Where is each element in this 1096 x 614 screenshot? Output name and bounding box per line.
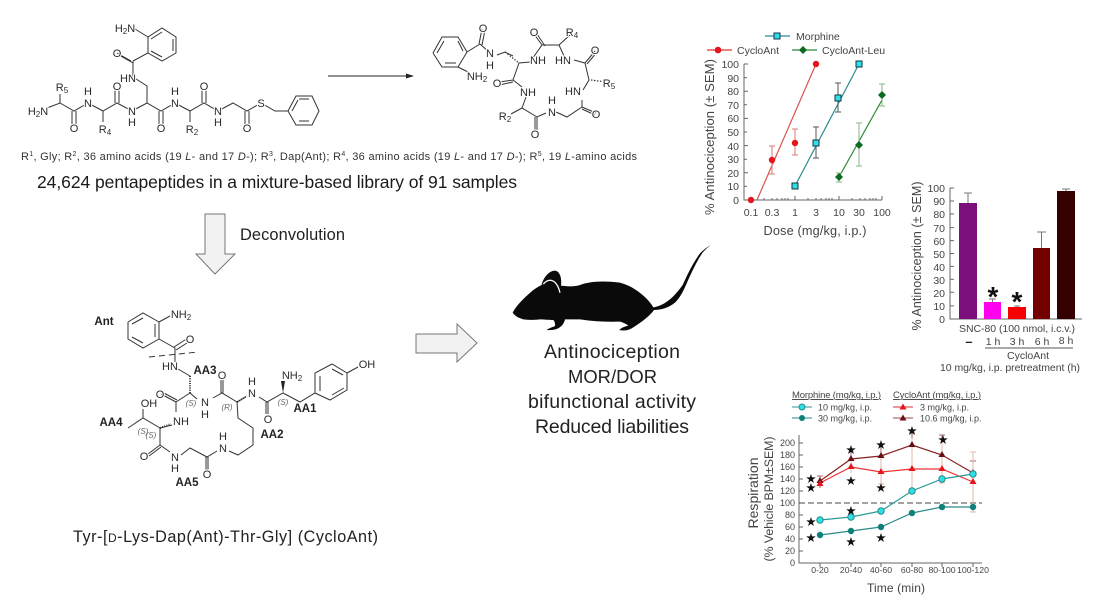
bar: SNC-80 alone [959,203,977,319]
chemical structure: linear pentapeptide thioester: N [84,98,92,110]
bar: 8 h [1057,191,1075,319]
chemical structure: cyclic pentapeptide: NH [530,55,546,67]
chemical structure: linear pentapeptide thioester: 2 [123,27,128,36]
chemical structure: cyclic pentapeptide: O [479,23,488,35]
chemical structure: linear pentapeptide thioester [28,23,319,137]
chemical structure: CycloAnt: AA1 [293,403,317,415]
chemical structure: linear pentapeptide thioester: N [214,106,222,118]
chart: respiration time course: 20 [785,546,795,556]
axis title: dose: Dose (mg/kg, i.p.) [764,224,866,238]
chemical structure: CycloAnt: H [171,463,179,475]
chart: respiration time course: 40-60 [870,565,892,575]
chemical structure: linear pentapeptide thioester: H [171,86,179,98]
chemical structure: linear pentapeptide thioester: S [257,98,265,110]
chart: SNC-80 bar chart: 40 [933,262,945,274]
library composition text: R [21,151,29,163]
chart: respiration time course: 160 [780,462,795,472]
chemical structure: linear pentapeptide thioester: H [115,23,123,35]
label: deconvolution: Deconvolution [240,226,345,244]
chemical structure: linear pentapeptide thioester: N [40,106,48,118]
chart: SNC-80 bar chart: * [1012,286,1023,317]
chemical structure: cyclic pentapeptide: H [486,60,494,72]
chemical structure: CycloAnt: (S) [146,431,157,440]
chemical structure: linear pentapeptide thioester: O [243,123,252,135]
legend: respiration: CycloAnt (mg/kg, i.p.) [893,390,981,401]
chemical structure: CycloAnt: AA3 [193,365,217,377]
text block: outcomes: MOR/DOR [568,366,657,387]
chemical structure: linear pentapeptide thioester: H [214,117,222,129]
chemical structure: cyclic pentapeptide: O [592,109,601,121]
chart: dose response: 40 [727,141,739,153]
library composition text: 3 [269,151,273,158]
chemical structure: cyclic pentapeptide: 4 [574,31,579,40]
bar: 1 h [984,302,1001,319]
chart: SNC-80 bar chart: * [988,281,999,312]
chemical structure: CycloAnt: N [201,397,209,409]
chart: respiration time course: ★ [845,474,857,488]
chart: SNC-80 bar chart: 50 [933,249,945,261]
chemical structure: cyclic pentapeptide: HN [565,86,581,98]
chart: SNC-80 bar chart: 30 [933,275,945,287]
library composition text: L- and 17 D-); R [185,151,269,163]
chart: dose response: 0.3 [765,207,779,219]
chart: respiration time course: 100 [780,498,795,508]
chart: respiration time course: 180 [780,450,795,460]
chart: respiration time course: 40 [785,534,795,544]
library composition text: 2 [73,151,77,158]
chemical structure: linear pentapeptide thioester: 2 [36,110,41,119]
chart: SNC-80 bar chart: 8 h [1059,335,1073,347]
chemical structure: linear pentapeptide thioester: O [70,123,79,135]
text block: outcomes: Antinociception [544,341,680,363]
chemical structure: CycloAnt: O [218,370,227,382]
chemical structure: linear pentapeptide thioester: 5 [64,86,69,95]
reaction arrow [328,74,414,78]
chart: respiration time course: 140 [780,474,795,484]
chart: SNC-80 bar chart: 60 [933,236,945,248]
chemical structure: CycloAnt: AA5 [175,477,199,489]
chemical structure: CycloAnt: H [219,431,227,443]
chart: SNC-80 bar chart: 1 h [986,336,1000,348]
chart: respiration time course: 60-80 [901,565,923,575]
chemical structure: cyclic pentapeptide: NH [520,87,536,99]
chart: dose response: 30 [727,154,739,166]
chart: dose response [702,31,891,238]
chemical structure: CycloAnt [94,309,375,489]
library composition text: , 36 amino acids (19 [346,151,454,163]
chart: dose response: 3 [813,207,819,219]
chart: respiration time course: ★ [805,481,817,495]
arrow: to activity [416,324,477,362]
chemical structure: cyclic pentapeptide: R [603,78,611,90]
chart: SNC-80 bar chart: 0 [939,314,945,326]
chart: SNC-80 bar chart: – [965,334,973,349]
library composition text: , 36 amino acids (19 [77,151,185,163]
chart: SNC-80 bar chart [910,182,1082,374]
chart: SNC-80 bar chart: 80 [933,209,945,221]
chart: respiration time course: 20-40 [840,565,862,575]
chemical structure: CycloAnt: OH [141,398,157,410]
chemical structure: CycloAnt: 2 [298,374,303,383]
chart: SNC-80 bar chart: 3 h [1010,336,1024,348]
chart: dose response: 100 [721,59,739,71]
chart: respiration time course: ★ [875,531,887,545]
chemical structure: linear pentapeptide thioester: O [157,123,166,135]
chemical structure: cyclic pentapeptide: 5 [611,82,616,91]
chemical structure: cyclic pentapeptide: 2 [483,75,488,84]
chemical structure: cyclic pentapeptide: HN [555,55,571,67]
axis title: antinociception: % Antinociception (± SEM) [702,59,717,215]
chemical structure: CycloAnt: AA2 [260,429,284,441]
chart: respiration time course: ★ [875,438,887,452]
library composition text: 1 [29,151,33,158]
chemical structure: linear pentapeptide thioester: O [113,81,122,93]
chemical structure: CycloAnt: (S) [138,427,149,436]
chemical structure: cyclic pentapeptide: O [530,27,539,39]
text block: outcomes: Reduced liabilities [535,416,689,438]
library composition text: L-amino acids [565,151,637,163]
chemical structure: CycloAnt: O [140,451,149,463]
chart: SNC-80 bar chart: CycloAnt [1007,350,1049,362]
chart: SNC-80 bar chart: 10 mg/kg, i.p. pretreatment (h) [940,362,1080,374]
compound name: Tyr-[D-Lys-Dap(Ant)-Thr-Gly] (CycloAnt) [73,528,378,546]
chemical structure: CycloAnt: O [156,389,165,401]
chemical structure: CycloAnt: HN [162,361,178,373]
legend: respiration: Morphine (mg/kg, i.p.) [792,390,881,401]
chart: respiration time course: 0-20 [811,565,829,575]
text block: outcomes [528,341,696,438]
legend: dose response [707,31,885,57]
chemical structure: CycloAnt: O [186,334,195,346]
legend: respiration: 10 mg/kg, i.p. [818,402,872,412]
chemical structure: cyclic pentapeptide: R [566,27,574,39]
axis title: respiration: (% Vehicle BPM±SEM) [762,436,776,562]
library composition text: , Dap(Ant); R [273,151,341,163]
chart: respiration time course: 60 [785,522,795,532]
chart: SNC-80 bar chart: 10 [933,301,945,313]
chemical structure: CycloAnt: (S) [278,398,289,407]
chemical structure: linear pentapeptide thioester: R [56,82,64,94]
legend: dose response: CycloAnt [737,45,779,57]
chart: respiration time course: ★ [875,481,887,495]
chart: respiration time course: 0 [790,558,795,568]
chemical structure: linear pentapeptide thioester: N [171,98,179,110]
chemical structure: CycloAnt: N [248,388,256,400]
chart: dose response: 10 [833,207,845,219]
chart: respiration time course: ★ [937,433,949,447]
chart: dose response: 10 [727,181,739,193]
chart: SNC-80 bar chart: SNC-80 (100 nmol, i.c.v.) [959,323,1075,335]
chart: dose response: 30 [853,207,865,219]
legend: respiration [792,390,982,424]
axis title: time: Time (min) [867,581,925,595]
chart: respiration time course: 80-100 [928,565,956,575]
library heading: 24,624 pentapeptides in a mixture-based library of 91 samples [37,172,517,192]
chemical structure: cyclic pentapeptide: 2 [507,115,512,124]
chemical structure: cyclic pentapeptide [433,23,616,141]
chemical structure: CycloAnt: Ant [94,316,114,328]
chemical structure: CycloAnt: H [248,376,256,388]
legend: respiration: 10.6 mg/kg, i.p. [920,414,982,424]
chemical structure: CycloAnt: OH [359,359,375,371]
chart: respiration time course [745,390,989,595]
chemical structure: cyclic pentapeptide: N [548,107,556,119]
axis title: respiration [745,436,776,562]
bar: 6 h [1033,248,1050,319]
chart: dose response: 0 [733,195,739,207]
chemical structure: CycloAnt: (S) [186,399,197,408]
chart: dose response: 60 [727,113,739,125]
library composition text: L- and 17 D-); R [454,151,537,163]
legend: respiration: 3 mg/kg, i.p. [920,402,969,412]
legend: dose response: CycloAnt-Leu [822,45,885,57]
chart: SNC-80 bar chart: 6 h [1035,336,1049,348]
chemical structure: CycloAnt: AA4 [99,417,123,429]
chemical structure: CycloAnt: NH [282,370,298,382]
library composition text: , 19 [542,151,565,163]
chemical structure: cyclic pentapeptide: NH [467,71,483,83]
chart: respiration time course: ★ [845,443,857,457]
chart: SNC-80 bar chart: 20 [933,288,945,300]
chart: SNC-80 bar chart: 70 [933,223,945,235]
chemical structure: linear pentapeptide thioester: 4 [107,128,112,137]
chart: respiration time course: ★ [906,424,918,438]
text block: outcomes: bifunctional activity [528,391,696,413]
bar: 3 h [1008,307,1026,319]
chemical structure: linear pentapeptide thioester: N [127,23,135,35]
legend: dose response: Morphine [796,31,840,43]
chart: respiration time course: ★ [845,535,857,549]
chart: dose response: 50 [727,127,739,139]
library composition text: 5 [538,151,542,158]
icon: mouse silhouette [513,245,711,330]
chart: dose response: 20 [727,168,739,180]
chart: respiration time course: ★ [805,472,817,486]
chemical structure: linear pentapeptide thioester: R [186,124,194,136]
axis title: antinociception: % Antinociception (± SEM) [910,182,924,330]
chart: dose response: 1 [792,207,798,219]
chemical structure: cyclic pentapeptide: O [493,78,502,90]
chemical structure: linear pentapeptide thioester: HN [120,73,136,85]
chemical structure: CycloAnt: O [203,469,212,481]
chemical structure: cyclic pentapeptide: H [548,95,556,107]
axis title: respiration: Respiration [745,458,761,528]
chemical structure: linear pentapeptide thioester: H [128,117,136,129]
chemical structure: cyclic pentapeptide: N [486,48,494,60]
library composition text: , Gly; R [33,151,72,163]
chemical structure: linear pentapeptide thioester: O [113,48,122,60]
chemical structure: linear pentapeptide thioester: R [99,124,107,136]
chemical structure: linear pentapeptide thioester: O [200,81,209,93]
chart: respiration time course: 100-120 [957,565,989,575]
arrow: deconvolution [196,214,235,274]
chart: respiration time course: ★ [805,515,817,529]
chemical structure: CycloAnt: O [264,414,273,426]
chemical structure: CycloAnt: NH [173,416,189,428]
chart: respiration time course: 120 [780,486,795,496]
chemical structure: CycloAnt: 2 [187,313,192,322]
chart: respiration time course: ★ [805,531,817,545]
chemical structure: linear pentapeptide thioester: H [84,86,92,98]
legend: respiration: 30 mg/kg, i.p. [818,414,872,424]
chemical structure: CycloAnt: H [201,409,209,421]
chart: respiration time course: 80 [785,510,795,520]
chart: dose response: 80 [727,86,739,98]
chart: dose response: 0.1 [744,207,758,219]
chemical structure: cyclic pentapeptide: R [499,111,507,123]
chart: respiration time course: 200 [780,438,795,448]
chart: dose response: 70 [727,100,739,112]
chart: respiration time course: ★ [845,504,857,518]
chart: dose response: 100 [873,207,891,219]
chemical structure: cyclic pentapeptide: O [531,129,540,141]
chemical structure: CycloAnt: N [219,443,227,455]
chemical structure: CycloAnt: (R) [221,403,233,412]
chemical structure: linear pentapeptide thioester: H [28,106,36,118]
chemical structure: CycloAnt: NH [171,309,187,321]
library composition text: 4 [341,151,345,158]
chart: SNC-80 bar chart: 90 [933,196,945,208]
chart: SNC-80 bar chart: 100 [927,183,945,195]
chemical structure: cyclic pentapeptide: O [591,45,600,57]
chart: dose response: 90 [727,73,739,85]
chemical structure: CycloAnt: N [171,452,179,464]
chemical structure: linear pentapeptide thioester: 2 [194,128,199,137]
chemical structure: linear pentapeptide thioester: N [128,106,136,118]
